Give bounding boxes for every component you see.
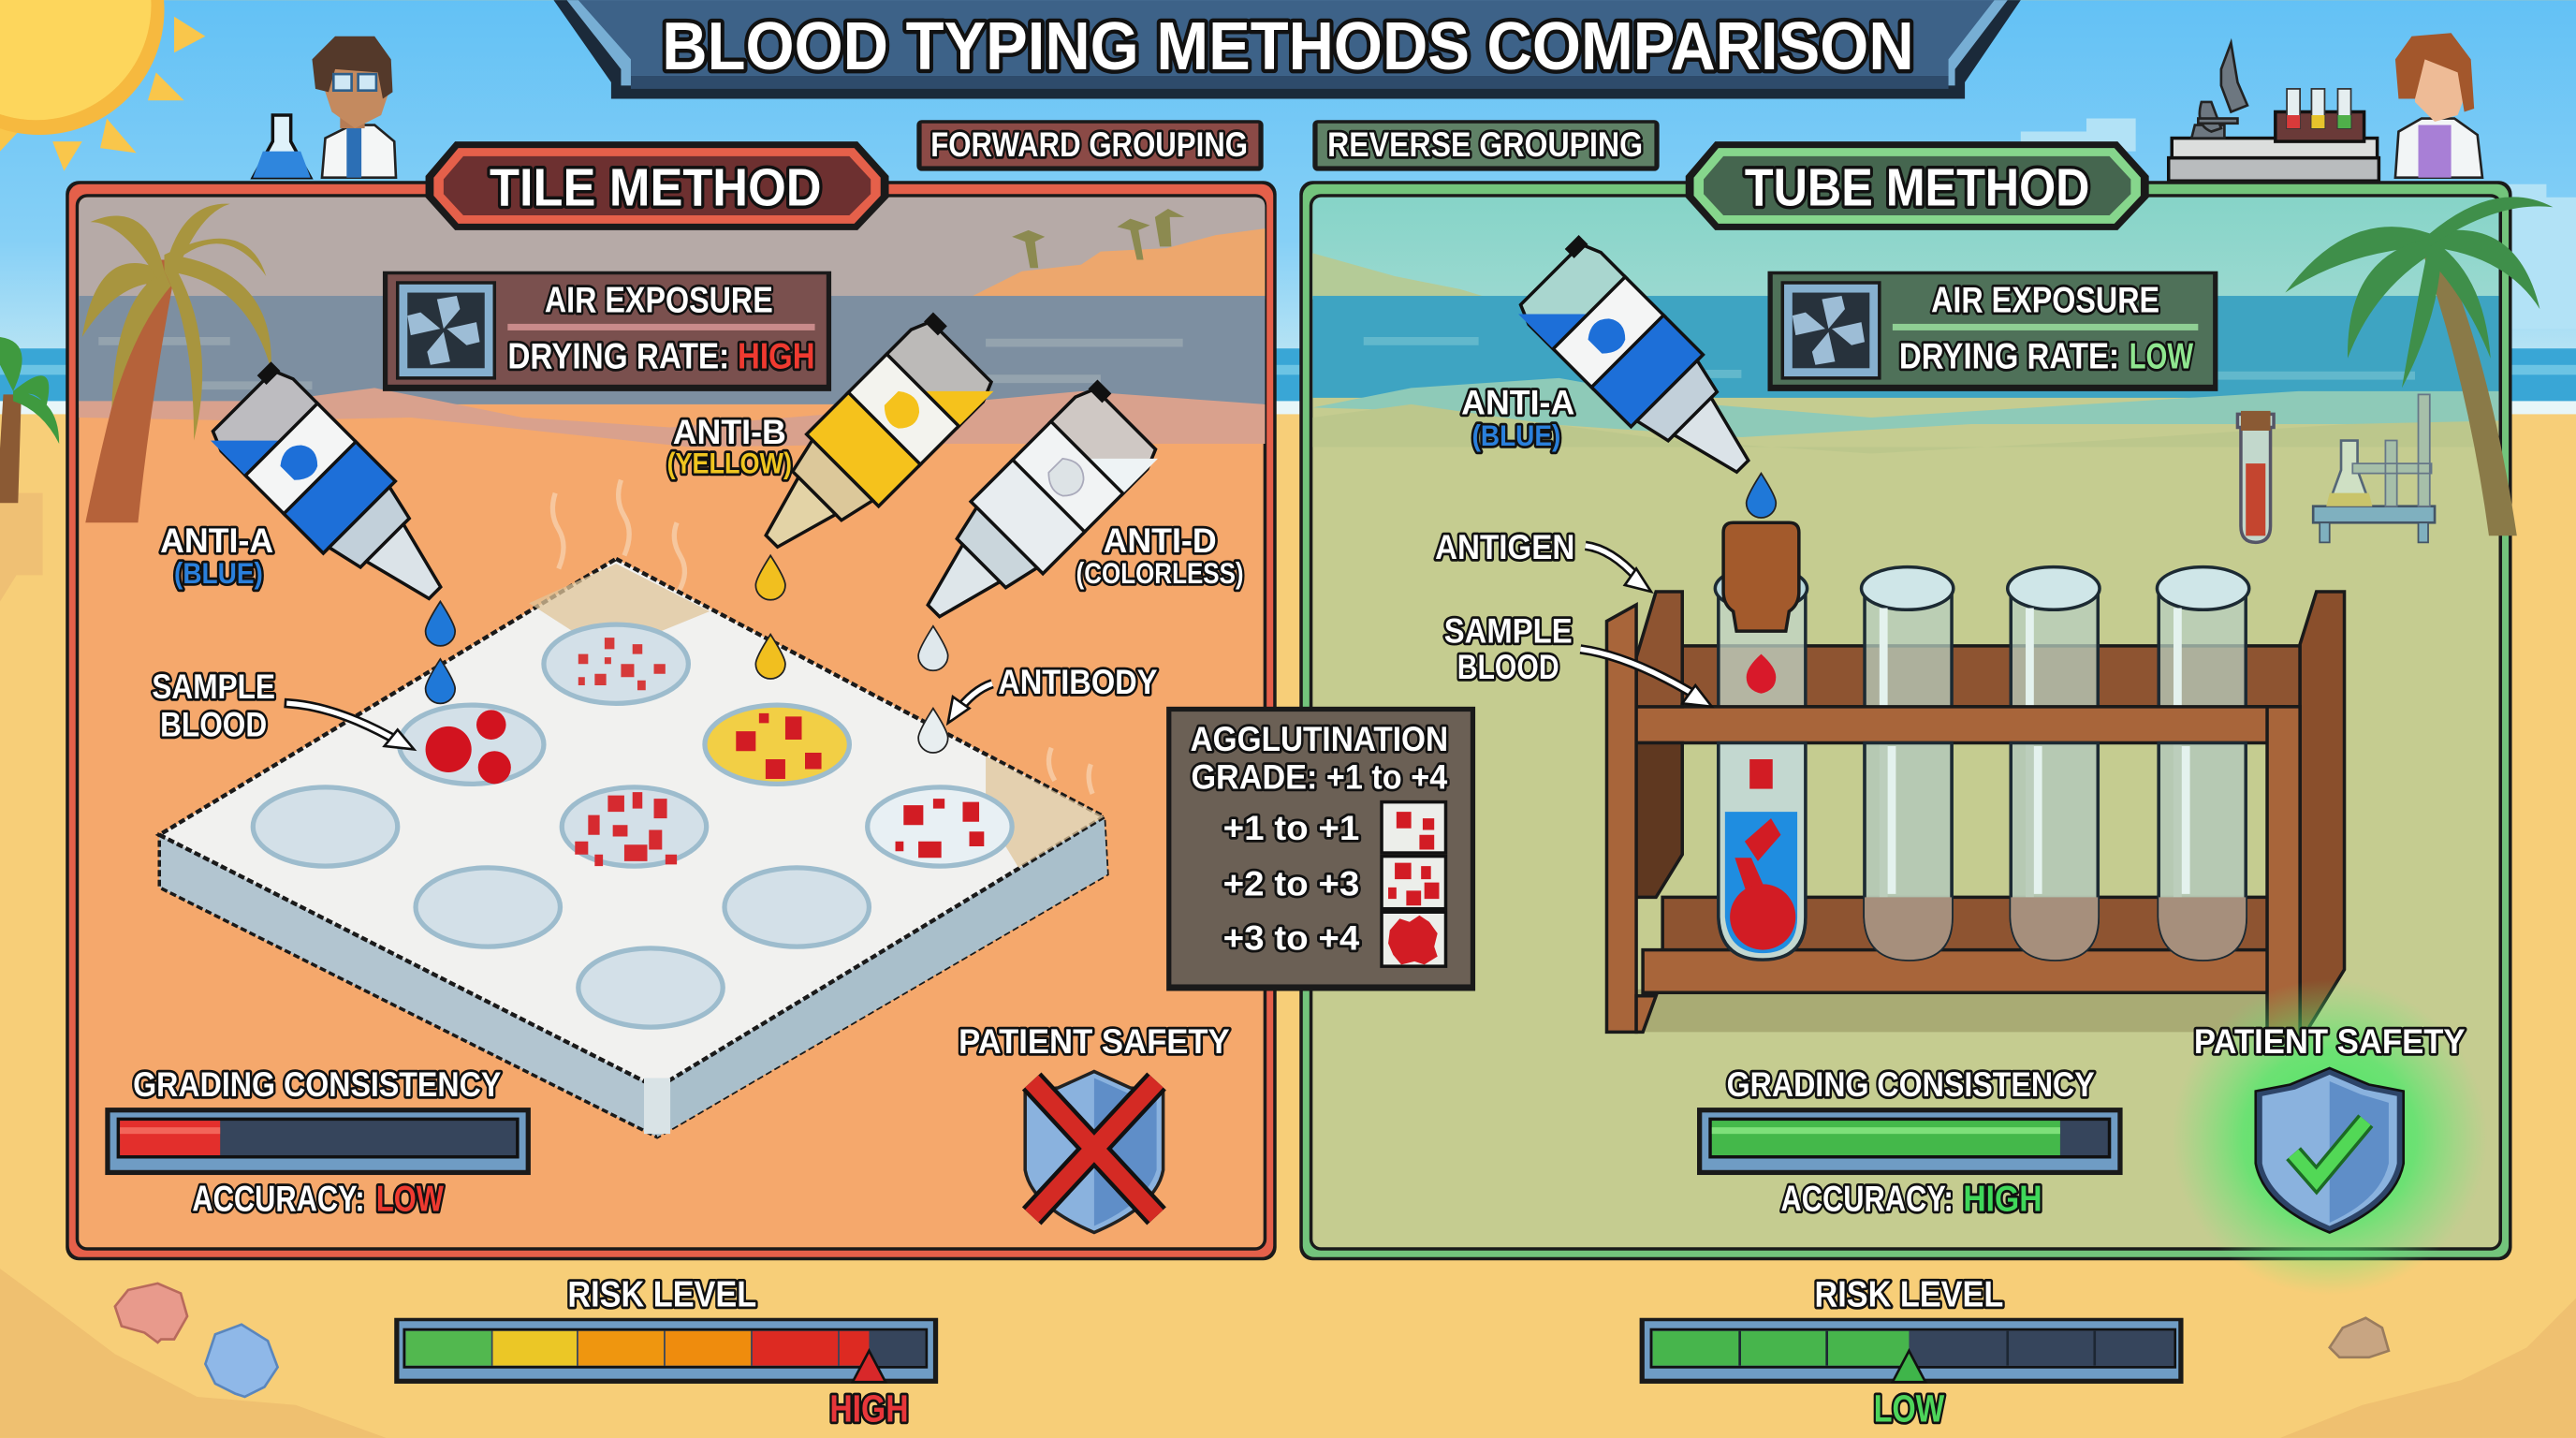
label: sample blood: SAMPLE [1444, 611, 1573, 650]
agglutination legend: GRADE: +1 to +4 [1191, 758, 1448, 797]
icon: check shield [2256, 1068, 2404, 1232]
heat waves [552, 480, 1092, 794]
tube 4 [2159, 585, 2246, 960]
grading consistency: tube [1697, 1065, 2123, 1220]
risk level meter: tube [1640, 1274, 2184, 1430]
label: anti-A blue [1461, 383, 1574, 452]
tube lower overlap [1865, 742, 2246, 960]
title: BLOOD TYPING METHODS COMPARISON [662, 9, 1914, 84]
bottle: anti-D colourless [898, 378, 1166, 647]
grading consistency: tube: GRADING CONSISTENCY [1727, 1065, 2095, 1104]
drop: yellow upper [755, 555, 785, 600]
bottle: anti-B yellow [736, 311, 1002, 577]
grade row 3: +3 to +4 [1223, 919, 1360, 958]
well: empty [578, 948, 723, 1027]
drop: blue lower [426, 659, 455, 703]
label: sample blood: BLOOD [160, 705, 267, 743]
patient safety: tile [959, 1022, 1230, 1232]
label: anti-D: (COLORLESS) [1076, 556, 1244, 590]
tube method badge [1686, 141, 2149, 230]
ceramic tile plate [159, 559, 1107, 1137]
grade row 1 [1223, 802, 1445, 853]
grading consistency: tile: LOW [376, 1180, 444, 1220]
tube panel palm [2285, 197, 2553, 536]
bottle: anti-A blue [202, 360, 471, 629]
tube rack [2276, 89, 2364, 141]
well: yellow with clumps [705, 705, 849, 784]
air exposure box: tile [383, 271, 831, 391]
well: empty [416, 868, 560, 946]
panel: tile method [66, 181, 1277, 1260]
label: anti-B: (YELLOW) [667, 447, 792, 480]
drop: clear lower [918, 709, 948, 753]
label: anti-A [160, 521, 273, 590]
air exposure box: tube: AIR EXPOSURE [1931, 281, 2159, 321]
wells [253, 624, 1012, 1027]
air exposure box: tube: DRYING RATE: [1899, 336, 2119, 376]
risk level meter: tile: RISK LEVEL [567, 1274, 756, 1314]
well: sample blood clumps [399, 705, 544, 784]
tube 3 [2011, 585, 2098, 960]
label: sample blood [152, 668, 275, 743]
grade row 3 [1223, 912, 1445, 966]
tube method badge: TUBE METHOD [1745, 158, 2089, 217]
label: sample blood [1444, 611, 1573, 686]
patient safety: tube: PATIENT SAFETY [2194, 1022, 2466, 1061]
microscope [2191, 43, 2247, 139]
risk segments [406, 1331, 869, 1366]
drop: tube blue [1747, 474, 1776, 518]
grading consistency: tube: ACCURACY: [1781, 1180, 1954, 1220]
grading consistency: tile [105, 1065, 531, 1220]
seashell blue [205, 1325, 278, 1397]
tube 1 contents [1723, 522, 1799, 694]
label: anti-B: ANTI-B [673, 413, 786, 451]
arrow: antibody [948, 683, 992, 723]
rack right post [2267, 592, 2345, 1042]
rack front shelf bottom [1643, 950, 2284, 992]
risk level meter: tile [394, 1274, 938, 1430]
risk level meter: tube: LOW [1874, 1387, 1945, 1430]
tube labels [1435, 383, 1712, 707]
tile method badge [426, 141, 889, 230]
icon: fan [1782, 283, 1880, 378]
tube panel scenery [1312, 198, 2499, 454]
grading consistency: tube: HIGH [1963, 1180, 2042, 1220]
forward grouping tag [916, 120, 1264, 171]
drop: clear upper [918, 626, 948, 670]
air exposure box: tube [1767, 271, 2217, 391]
tile panel scenery [79, 198, 1265, 448]
outer left palm [0, 337, 59, 503]
risk marker [1893, 1351, 1925, 1382]
risk segments [1653, 1331, 2095, 1366]
air exposure box: tile: AIR EXPOSURE [545, 281, 773, 321]
air exposure box: tile: HIGH [738, 336, 815, 376]
panel: tube method [1299, 181, 2553, 1260]
arrow: sample blood [1580, 649, 1712, 707]
seashell pink [115, 1284, 187, 1343]
grading consistency: tile: ACCURACY: [192, 1180, 365, 1220]
arrow: sample blood [289, 703, 414, 749]
well: empty [724, 868, 869, 946]
tube 1 [1719, 585, 1806, 960]
air exposure box: tile: DRYING RATE: [507, 336, 729, 376]
label: anti-A blue: (BLUE) [1472, 418, 1560, 452]
patient safety: tile: PATIENT SAFETY [959, 1022, 1230, 1061]
risk level meter: tube: RISK LEVEL [1815, 1274, 2003, 1314]
grade row 2: +2 to +3 [1223, 865, 1359, 903]
tile method badge: TILE METHOD [490, 158, 822, 217]
rack back and rear shelves [1634, 646, 2300, 1032]
green glow [2172, 979, 2487, 1295]
background lab glassware [2237, 394, 2435, 542]
reverse grouping tag: REVERSE GROUPING [1327, 125, 1643, 164]
test tube rack [1606, 522, 2345, 1042]
icon: crossed shield [1025, 1071, 1164, 1232]
label: anti-A blue: ANTI-A [1461, 383, 1574, 421]
label: anti-A: (BLUE) [174, 556, 263, 590]
well: anti-A top dots [544, 624, 688, 703]
label: anti-A: ANTI-A [160, 521, 273, 560]
tile labels [152, 413, 1244, 749]
drop: yellow lower [755, 635, 785, 679]
pebble shell [2330, 1318, 2389, 1357]
patient safety: tube [2172, 979, 2487, 1295]
rack left post [1606, 592, 1682, 1032]
lab bench with microscope and scientist right [2169, 33, 2482, 181]
risk marker [853, 1351, 886, 1382]
agglutination legend [1166, 707, 1475, 990]
tube 2 [1865, 585, 1952, 960]
forward grouping tag: FORWARD GROUPING [930, 125, 1248, 164]
label: antigen: ANTIGEN [1435, 528, 1574, 566]
sun [0, 0, 205, 171]
tube 1 blue reagent with clumps [1719, 742, 1806, 960]
label: sample blood: SAMPLE [152, 668, 275, 706]
label: sample blood: BLOOD [1457, 648, 1559, 686]
air exposure box: tube: LOW [2130, 336, 2193, 376]
drop: blue upper [426, 602, 455, 646]
grading consistency: tile: GRADING CONSISTENCY [133, 1065, 501, 1104]
scientist left with flask [253, 37, 396, 178]
reverse grouping tag [1312, 120, 1660, 171]
label: anti-B [667, 413, 792, 480]
arrow: antigen [1586, 546, 1651, 592]
drops [426, 474, 1776, 753]
label: anti-D: ANTI-D [1104, 521, 1217, 560]
label: anti-D [1076, 521, 1244, 590]
tile panel palm [82, 204, 271, 522]
grade row 2 [1223, 857, 1445, 909]
rack front shelf top [1634, 707, 2284, 742]
bottle: tube anti-A blue [1510, 234, 1778, 502]
label: antibody: ANTIBODY [998, 663, 1157, 701]
empty tube backs and glass [1719, 585, 2246, 960]
well: white with clumps [868, 787, 1012, 866]
icon: fan [398, 283, 494, 378]
well: empty [253, 787, 398, 866]
risk level meter: tile: HIGH [829, 1387, 909, 1430]
well: fine agglutination [562, 787, 707, 866]
title banner [553, 0, 2021, 98]
agglutination legend: AGGLUTINATION [1191, 720, 1448, 758]
grade row 1: +1 to +1 [1223, 809, 1359, 847]
flask [253, 115, 311, 178]
